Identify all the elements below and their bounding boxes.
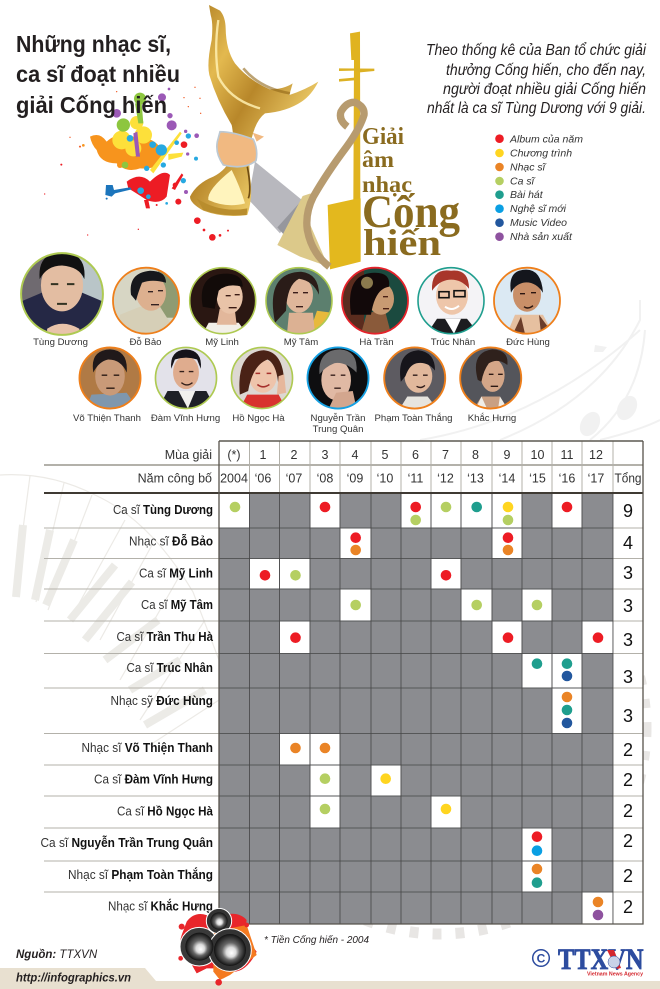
portrait: Nguyễn Trần Trung Quân xyxy=(307,347,369,435)
portrait: Mỹ Linh: Mỹ Linh xyxy=(205,337,239,348)
title: Những nhạc sĩ, xyxy=(16,31,171,57)
table header: 2 xyxy=(291,448,298,462)
portrait: Hồ Ngọc Hà xyxy=(231,347,293,424)
table header: Mùa giải xyxy=(165,448,212,462)
row: Đàm Vĩnh Hưng: 2 xyxy=(623,770,633,790)
logo: Giải âm nhạc Cống hiến: Giải xyxy=(362,124,404,150)
row: Tùng Dương xyxy=(113,494,633,528)
row: Phạm Toàn Thắng: 2 xyxy=(623,866,633,886)
table header: (*) xyxy=(227,448,241,462)
row: Mỹ Tâm: Ca sĩ Mỹ Tâm xyxy=(141,597,213,612)
table grid xyxy=(44,493,643,924)
row: Trần Thu Hà: 3 xyxy=(623,630,633,650)
portrait: Phạm Toàn Thắng xyxy=(374,347,453,424)
row: Phạm Toàn Thắng xyxy=(68,862,633,892)
table header xyxy=(44,441,643,493)
table header: 2004 xyxy=(220,472,248,486)
hand xyxy=(217,132,257,167)
row: Đức Hùng: Nhạc sỹ Đức Hùng xyxy=(110,693,213,708)
legend xyxy=(495,134,583,243)
row: Trúc Nhân: Ca sĩ Trúc Nhân xyxy=(126,660,213,675)
portrait: Trúc Nhân: Trúc Nhân xyxy=(431,337,475,348)
table header: 11 xyxy=(561,448,574,462)
portrait: Hà Trần: Hà Trần xyxy=(359,337,394,348)
table header: Tổng xyxy=(614,472,642,486)
portrait: Đàm Vĩnh Hưng xyxy=(151,347,220,424)
row: Mỹ Linh: 3 xyxy=(623,563,633,583)
portrait: Võ Thiện Thanh xyxy=(73,347,141,424)
table header: ‘14 xyxy=(499,472,515,486)
logo: Giải âm nhạc Cống hiến xyxy=(277,32,460,269)
intro text: người đoạt nhiều giải Cống hiến xyxy=(443,81,646,98)
table header: 4 xyxy=(352,448,359,462)
table header: 1 xyxy=(260,448,267,462)
table header: 12 xyxy=(589,448,603,462)
icon: golden trophy held by a hand xyxy=(190,5,318,236)
table header: 5 xyxy=(382,448,389,462)
table header: ‘17 xyxy=(588,472,604,486)
portrait: Đỗ Bảo xyxy=(113,268,180,348)
table header: 9 xyxy=(504,448,511,462)
logo: Giải âm nhạc Cống hiến: âm xyxy=(362,147,394,172)
logo: Giải âm nhạc Cống hiến: nhạc xyxy=(362,172,412,197)
row: Đức Hùng xyxy=(110,688,633,733)
portrait: Hồ Ngọc Hà: Hồ Ngọc Hà xyxy=(232,413,285,424)
logo: TTXVN xyxy=(533,943,644,978)
portrait: Tùng Dương xyxy=(21,252,104,348)
legend: Ca sĩ xyxy=(510,176,536,188)
row: Đàm Vĩnh Hưng: Ca sĩ Đàm Vĩnh Hưng xyxy=(94,772,213,787)
row: Võ Thiện Thanh: 2 xyxy=(623,740,633,760)
title: giải Cống hiến xyxy=(16,92,167,118)
table header: 8 xyxy=(472,448,479,462)
table borders xyxy=(44,441,643,924)
table header: 6 xyxy=(412,448,419,462)
table header: ‘11 xyxy=(408,472,423,486)
row: Đỗ Bảo: Nhạc sĩ Đỗ Bảo xyxy=(129,534,213,549)
row: Trúc Nhân: 3 xyxy=(623,667,633,687)
row: Đức Hùng: 3 xyxy=(623,706,633,726)
row: Mỹ Linh: Ca sĩ Mỹ Linh xyxy=(139,566,213,581)
row: Tùng Dương: 9 xyxy=(623,501,633,521)
legend: Nhạc sĩ xyxy=(510,162,547,174)
row: Khắc Hưng: 2 xyxy=(623,897,633,917)
background: piano key fan and music notes xyxy=(0,300,660,934)
portrait: Phạm Toàn Thắng: Phạm Toàn Thắng xyxy=(374,413,453,424)
legend: Bài hát xyxy=(510,189,544,201)
portrait: Trúc Nhân xyxy=(418,268,484,348)
icon: paint splash xyxy=(44,87,229,241)
row: Võ Thiện Thanh xyxy=(82,734,633,764)
logo: Giải âm nhạc Cống hiến: Cống xyxy=(362,186,460,238)
website: http://infographics.vn xyxy=(16,970,131,984)
table header: 10 xyxy=(531,448,544,462)
portrait: Mỹ Tâm xyxy=(266,268,332,348)
row: Phạm Toàn Thắng: Nhạc sĩ Phạm Toàn Thắng xyxy=(68,867,213,882)
row: Hồ Ngọc Hà: 2 xyxy=(623,801,633,821)
logo: TTXVN: Vietnam News Agency xyxy=(587,972,643,978)
row: Võ Thiện Thanh: Nhạc sĩ Võ Thiện Thanh xyxy=(82,740,213,755)
portrait: Võ Thiện Thanh: Võ Thiện Thanh xyxy=(73,413,141,424)
table header: ‘10 xyxy=(377,472,393,486)
row: Trần Thu Hà: Ca sĩ Trần Thu Hà xyxy=(116,629,214,644)
table header: ‘16 xyxy=(559,472,575,486)
row: Mỹ Linh xyxy=(139,559,633,588)
source: Nguồn: TTXVN xyxy=(16,949,98,961)
portrait: Đức Hùng: Đức Hùng xyxy=(506,337,550,348)
row: Nguyễn Trần Trung Quân: 2 xyxy=(623,831,633,851)
row: Khắc Hưng: Nhạc sĩ Khắc Hưng xyxy=(108,899,213,914)
legend: Album của năm xyxy=(509,134,583,146)
intro text: thưởng Cống hiến, cho đến nay, xyxy=(446,62,646,79)
intro text xyxy=(426,42,646,117)
icon: speakers xyxy=(178,908,257,986)
portrait: Khắc Hưng: Khắc Hưng xyxy=(468,413,516,424)
logo: Giải âm nhạc Cống hiến: hiến xyxy=(363,223,441,264)
table header: Năm công bố xyxy=(138,472,212,486)
legend: Nghệ sĩ mới xyxy=(510,203,567,215)
table header: ‘12 xyxy=(437,472,454,486)
portrait: Đức Hùng xyxy=(494,268,560,348)
table header: ‘07 xyxy=(286,472,302,486)
portrait: Đàm Vĩnh Hưng: Đàm Vĩnh Hưng xyxy=(151,413,220,424)
row: Mỹ Tâm: 3 xyxy=(623,596,633,616)
table header: 7 xyxy=(442,448,449,462)
arm xyxy=(248,162,302,233)
portrait: Khắc Hưng xyxy=(460,347,521,424)
logo: TTXVN: TTXVN xyxy=(558,943,644,976)
portrait: Hà Trần xyxy=(342,268,408,348)
title: ca sĩ đoạt nhiều xyxy=(16,61,180,87)
portrait: Tùng Dương: Tùng Dương xyxy=(33,337,88,348)
portrait: Nguyễn Trần Trung Quân: Trung Quân xyxy=(313,424,363,435)
row: Nguyễn Trần Trung Quân: Ca sĩ Nguyễn Trần Trung Quân xyxy=(40,835,213,850)
table header: ‘15 xyxy=(529,472,546,486)
portrait: Nguyễn Trần Trung Quân: Nguyễn Trần xyxy=(311,413,365,424)
row: Hồ Ngọc Hà: Ca sĩ Hồ Ngọc Hà xyxy=(117,804,214,819)
legend: Music Video xyxy=(510,217,567,229)
row: Đàm Vĩnh Hưng xyxy=(94,766,633,796)
row: Đỗ Bảo: 4 xyxy=(623,533,633,553)
logo: TTXVN: C xyxy=(537,952,546,966)
row: Trúc Nhân xyxy=(126,654,633,688)
trophy xyxy=(190,5,318,216)
table header: 3 xyxy=(322,448,329,462)
row: Mỹ Tâm xyxy=(141,590,633,620)
title xyxy=(16,31,180,118)
portrait: Mỹ Tâm: Mỹ Tâm xyxy=(284,337,318,348)
legend: Chương trình xyxy=(510,148,572,160)
row: Khắc Hưng xyxy=(108,892,633,924)
table header: ‘13 xyxy=(467,472,484,486)
portrait: Mỹ Linh xyxy=(190,268,256,348)
table header: ‘08 xyxy=(317,472,333,486)
row: Tùng Dương: Ca sĩ Tùng Dương xyxy=(113,502,213,517)
row: Nguyễn Trần Trung Quân xyxy=(40,828,633,860)
footer band xyxy=(0,968,660,989)
note: Tiền Cống hiến: * Tiền Cống hiến - 2004 xyxy=(264,934,369,946)
table header: ‘06 xyxy=(255,472,271,486)
portrait: Đỗ Bảo: Đỗ Bảo xyxy=(130,337,162,348)
legend: Nhà sản xuất xyxy=(510,231,573,243)
table header: ‘09 xyxy=(347,472,363,486)
row: Đỗ Bảo xyxy=(129,528,633,558)
row: Trần Thu Hà xyxy=(116,622,633,653)
row: Hồ Ngọc Hà xyxy=(117,796,633,828)
